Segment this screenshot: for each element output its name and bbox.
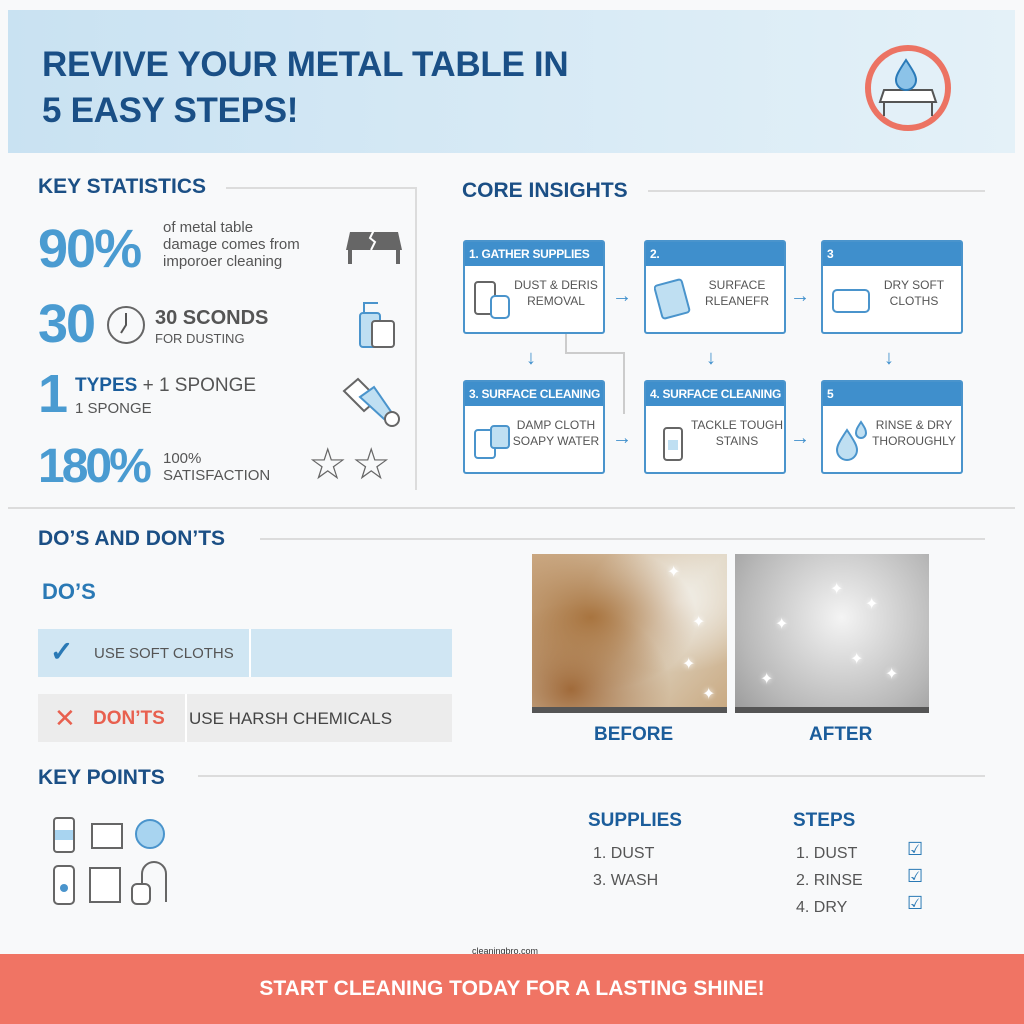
stat 180%: SATISFACTION — [163, 467, 270, 484]
icon: table with drop — [865, 45, 951, 131]
photo: before: ✦ — [702, 686, 715, 703]
don't bar: USE HARSH CHEMICALS — [189, 709, 392, 728]
photo: after: ✦ — [760, 671, 773, 688]
stat 1 types: 1 SPONGE — [75, 400, 152, 417]
box 3: DRY SOFT CLOTHS — [884, 278, 944, 308]
list: supplies: SUPPLIES — [588, 810, 682, 831]
list: steps: STEPS — [793, 810, 855, 831]
list: steps: 2. RINSE — [796, 872, 863, 889]
stat 180%: 180% — [38, 440, 149, 493]
photo: before: ✦ — [692, 614, 705, 631]
heading: do's and don'ts: DO’S AND DON’TS — [38, 527, 225, 550]
stat 1 types: 1 — [38, 364, 66, 424]
box 1: 1. GATHER SUPPLIES — [469, 247, 589, 261]
box 6: 5 — [827, 387, 833, 401]
footer banner: START CLEANING TODAY FOR A LASTING SHINE! — [259, 977, 765, 1000]
photo: after — [735, 554, 929, 713]
icon: brush — [342, 378, 400, 427]
stat 30 — [38, 294, 395, 354]
box 1 — [463, 240, 605, 334]
stat 90%: of metal table — [163, 219, 253, 236]
footer banner — [0, 954, 1024, 1024]
arrows: → — [612, 427, 632, 449]
stat 90%: 90% — [38, 219, 140, 279]
arrows: → — [790, 285, 810, 307]
photo: after: ✦ — [885, 666, 898, 683]
title: 5 EASY STEPS! — [42, 91, 298, 130]
title — [42, 45, 568, 130]
list: supplies: 1. DUST — [593, 845, 654, 862]
icon: clock — [107, 306, 145, 344]
box 5: 4. SURFACE CLEANING — [650, 387, 781, 401]
stat 90%: imporoer cleaning — [163, 253, 282, 270]
list: supplies: 3. WASH — [593, 872, 658, 889]
arrows: ↓ — [884, 347, 894, 369]
box 2 — [644, 240, 786, 334]
stat 30: 30 SCONDS — [155, 307, 268, 329]
arrows: → — [790, 427, 810, 449]
icon: spray bottle — [359, 302, 395, 348]
photo: before: ✦ — [667, 564, 680, 581]
photo: after: ✦ — [830, 581, 843, 598]
checkboxes — [907, 839, 923, 913]
header banner — [8, 10, 1015, 153]
heading: key statistics: KEY STATISTICS — [38, 175, 206, 198]
box 4: 3. SURFACE CLEANING — [469, 387, 600, 401]
stat 30: 30 — [38, 294, 94, 354]
photo: after: ✦ — [775, 616, 788, 633]
don't bar: DON’TS — [93, 708, 165, 729]
checkboxes: ☑ — [907, 893, 923, 913]
source credit: cleaningbro.com — [472, 946, 538, 956]
box 4 — [463, 380, 605, 474]
stat 180% — [38, 440, 395, 493]
stat 1 types — [38, 364, 400, 427]
icon: broken table — [346, 232, 402, 264]
box 6 — [821, 380, 963, 474]
heading: core insights: CORE INSIGHTS — [462, 179, 628, 202]
stat 30: FOR DUSTING — [155, 331, 245, 346]
checkboxes: ☑ — [907, 866, 923, 886]
list: steps: 4. DRY — [796, 899, 847, 916]
box 6: RINSE & DRY THOROUGHLY — [872, 418, 956, 448]
photo: after: ✦ — [865, 596, 878, 613]
title: REVIVE YOUR METAL TABLE IN — [42, 45, 568, 84]
arrows: ↓ — [706, 347, 716, 369]
photo: before: ✦ — [682, 656, 695, 673]
do bar: USE SOFT CLOTHS — [94, 645, 234, 662]
do bar — [38, 629, 452, 677]
flow diagram — [463, 240, 963, 474]
stat 90% — [38, 219, 402, 279]
box 3: 3 — [827, 247, 833, 261]
label: after: AFTER — [809, 724, 872, 745]
list: steps: 1. DUST — [796, 845, 857, 862]
stat 1 types: TYPES + 1 SPONGE — [75, 375, 256, 396]
subheading: do's: DO’S — [42, 579, 96, 604]
box 3 — [821, 240, 963, 334]
list: steps — [793, 810, 923, 916]
don't bar: ✕ — [54, 703, 76, 733]
box 4: DAMP CLOTH SOAPY WATER — [513, 418, 599, 448]
heading: key points: KEY POINTS — [38, 766, 165, 789]
don't bar — [38, 694, 452, 742]
icon grid — [53, 817, 167, 905]
checkboxes: ☑ — [907, 839, 923, 859]
label: before: BEFORE — [594, 724, 673, 745]
stat 180%: 100% — [163, 450, 201, 467]
photo: before — [532, 554, 727, 713]
do bar: ✓ — [50, 636, 73, 667]
box 2: SURFACE RLEANEFR — [705, 278, 769, 308]
arrows: ↓ — [526, 347, 536, 369]
arrows — [526, 285, 894, 449]
icon: stars: ☆☆ — [308, 440, 395, 489]
photo: after: ✦ — [850, 651, 863, 668]
list: supplies — [588, 810, 682, 889]
arrows: → — [612, 285, 632, 307]
box 5: TACKLE TOUGH STAINS — [691, 418, 783, 448]
box 2: 2. — [650, 247, 659, 261]
box 5 — [644, 380, 786, 474]
stat 90%: damage comes from — [163, 236, 300, 253]
box 1: DUST & DERIS REMOVAL — [514, 278, 598, 308]
